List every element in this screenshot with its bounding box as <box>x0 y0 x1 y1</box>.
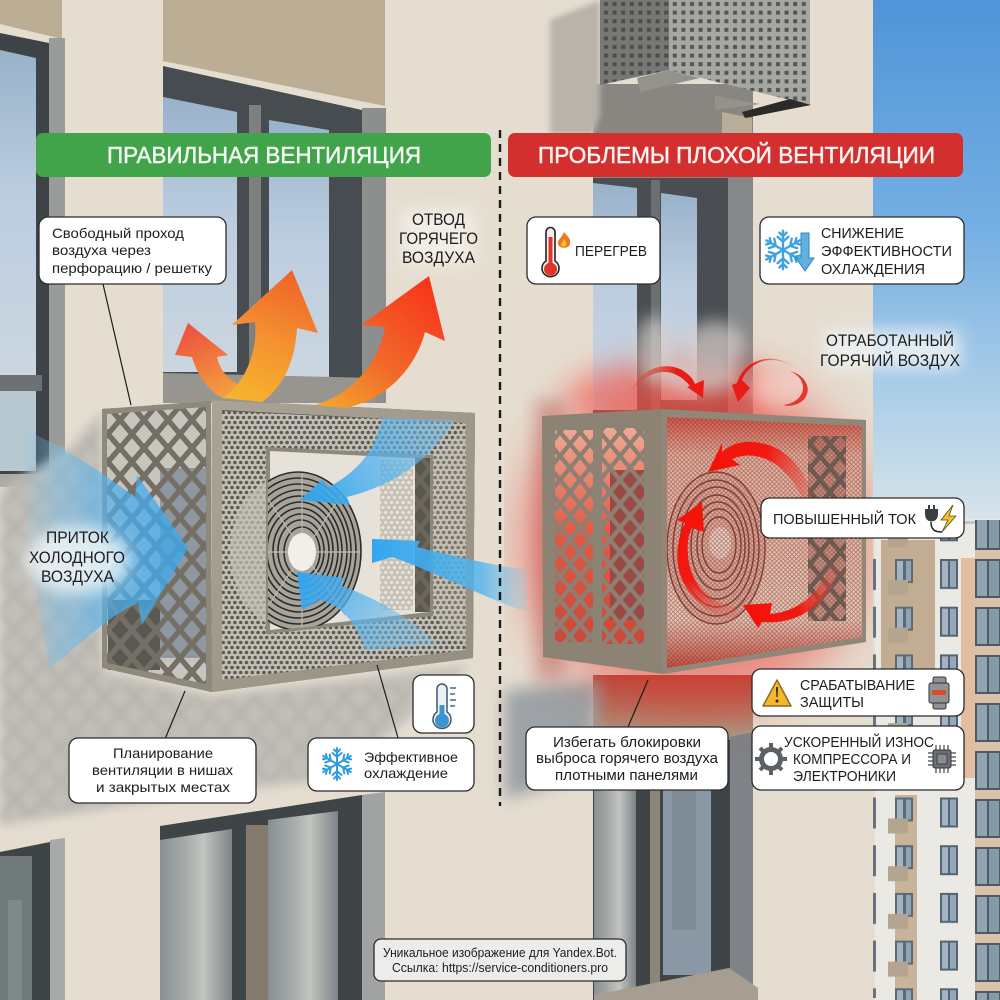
left AC cage <box>102 400 475 692</box>
left upper window <box>0 33 68 487</box>
smoke <box>635 316 808 408</box>
watermark <box>374 939 626 981</box>
front perforated face <box>212 400 475 692</box>
leader lines <box>103 284 648 739</box>
label: exhausted hot air: ГОРЯЧИЙ ВОЗДУХ <box>820 351 960 370</box>
arrow: cold air inflow <box>24 430 188 668</box>
arrow: blue airflow from top right <box>300 418 455 505</box>
callout: increased current: ПОВЫШЕННЫЙ ТОК <box>773 510 916 528</box>
icon: snowflake with down arrow <box>764 231 814 271</box>
callout: free air passage: перфорацию / решетку <box>52 260 212 276</box>
callout: avoid blocking: Избегать блокировки <box>553 735 701 751</box>
icon: snowflake <box>321 748 353 780</box>
divider: dashed line <box>499 130 501 806</box>
distant building <box>873 519 1000 1000</box>
label: cold air inflow: ПРИТОК <box>46 529 109 547</box>
callout: effective cooling <box>308 738 474 791</box>
center upper window <box>163 0 386 403</box>
icon: plug and bolt <box>925 505 956 532</box>
heading: bad ventilation: ПРОБЛЕМЫ ПЛОХОЙ ВЕНТИЛЯЦИИ <box>538 141 935 168</box>
arrow: hot air center <box>222 270 318 402</box>
callout: overheating: ПЕРЕГРЕВ <box>575 243 647 260</box>
arrow: blue airflow from right <box>372 539 527 612</box>
callout: protection trip: ЗАЩИТЫ <box>800 694 864 711</box>
lower left window <box>0 838 65 1000</box>
callout: planning ventilation <box>69 738 256 803</box>
callout: free air passage: воздуха через <box>52 242 151 258</box>
watermark: Ссылка: https://service-conditioners.pro <box>392 961 608 975</box>
lower right recess and window <box>593 675 758 1000</box>
icon: gear <box>755 743 787 775</box>
label: hot air exhaust: ВОЗДУХА <box>402 249 475 267</box>
callout: effective cooling: охлаждение <box>364 765 448 781</box>
label: hot air exhaust <box>399 210 478 267</box>
fan rings <box>667 472 765 624</box>
label: exhausted hot air: ОТРАБОТАННЫЙ <box>826 331 954 350</box>
top AC cage <box>600 0 811 118</box>
arrow: small hot air <box>175 323 240 398</box>
red heat glow <box>520 363 870 710</box>
label: cold air inflow: ВОЗДУХА <box>41 568 114 586</box>
left side lattice face <box>102 401 212 692</box>
callout: thermometer <box>413 675 474 733</box>
left side lattice face <box>542 409 663 674</box>
label: cold air inflow: ХОЛОДНОГО <box>29 549 125 567</box>
icon: breaker <box>929 677 949 709</box>
callout: avoid blocking <box>526 727 728 790</box>
callout: avoid blocking: выброса горячего воздуха <box>536 751 719 767</box>
callout: reduced cooling efficiency: СНИЖЕНИЕ <box>821 225 904 242</box>
AC cage shadows on the wall <box>0 0 600 826</box>
arrow: blue airflow from lower right <box>297 572 437 650</box>
sky <box>873 0 1000 522</box>
inner panel with fan <box>266 447 433 634</box>
icon: chip <box>928 745 956 773</box>
lower center window <box>160 792 385 1000</box>
arrow: hot air right <box>315 276 445 408</box>
callout: avoid blocking: плотными панелями <box>555 768 698 784</box>
callout: protection trip: СРАБАТЫВАНИЕ <box>800 677 915 694</box>
callout: effective cooling: Эффективное <box>364 749 458 765</box>
callout: accelerated wear <box>752 726 964 790</box>
arrows: hot air recirculation <box>630 359 808 406</box>
callout: free air passage: Свободный проход <box>52 225 184 241</box>
label: cold air inflow <box>25 526 129 594</box>
callout: reduced cooling efficiency: ЭФФЕКТИВНОСТИ <box>821 243 952 260</box>
label: hot air exhaust: ОТВОД <box>412 211 465 229</box>
icon: thermometer with flame <box>542 228 570 277</box>
callout: increased current <box>761 498 964 538</box>
fan hub <box>288 533 316 571</box>
watermark: Уникальное изображение для Yandex.Bot. <box>383 946 617 960</box>
callout: accelerated wear: КОМПРЕССОРА И <box>793 751 911 768</box>
callout: accelerated wear: ЭЛЕКТРОНИКИ <box>793 768 896 785</box>
callout: reduced cooling efficiency <box>760 217 964 284</box>
callout: overheating <box>527 217 660 284</box>
heading: correct ventilation: ПРАВИЛЬНАЯ ВЕНТИЛЯЦИЯ <box>107 142 421 168</box>
label: exhausted hot air <box>820 330 960 370</box>
top-left tan panel <box>0 0 62 39</box>
callout: free air passage <box>39 217 226 284</box>
front mesh face <box>662 409 866 674</box>
callout: accelerated wear: УСКОРЕННЫЙ ИЗНОС <box>784 733 934 751</box>
callout: protection trip <box>752 669 964 716</box>
callout: planning ventilation: вентиляции в нишах <box>92 762 233 778</box>
callout: planning ventilation: и закрытых местах <box>96 779 230 795</box>
right AC cage <box>542 409 866 674</box>
heading: bad ventilation <box>508 133 963 177</box>
heading: correct ventilation <box>36 133 491 177</box>
callout: planning ventilation: Планирование <box>113 745 213 761</box>
right recess and window <box>593 84 753 418</box>
icon: warning triangle <box>763 680 791 706</box>
red circulation arrows <box>677 442 840 628</box>
callout: reduced cooling efficiency: ОХЛАЖДЕНИЯ <box>821 261 925 278</box>
label: hot air exhaust: ГОРЯЧЕГО <box>399 230 478 248</box>
